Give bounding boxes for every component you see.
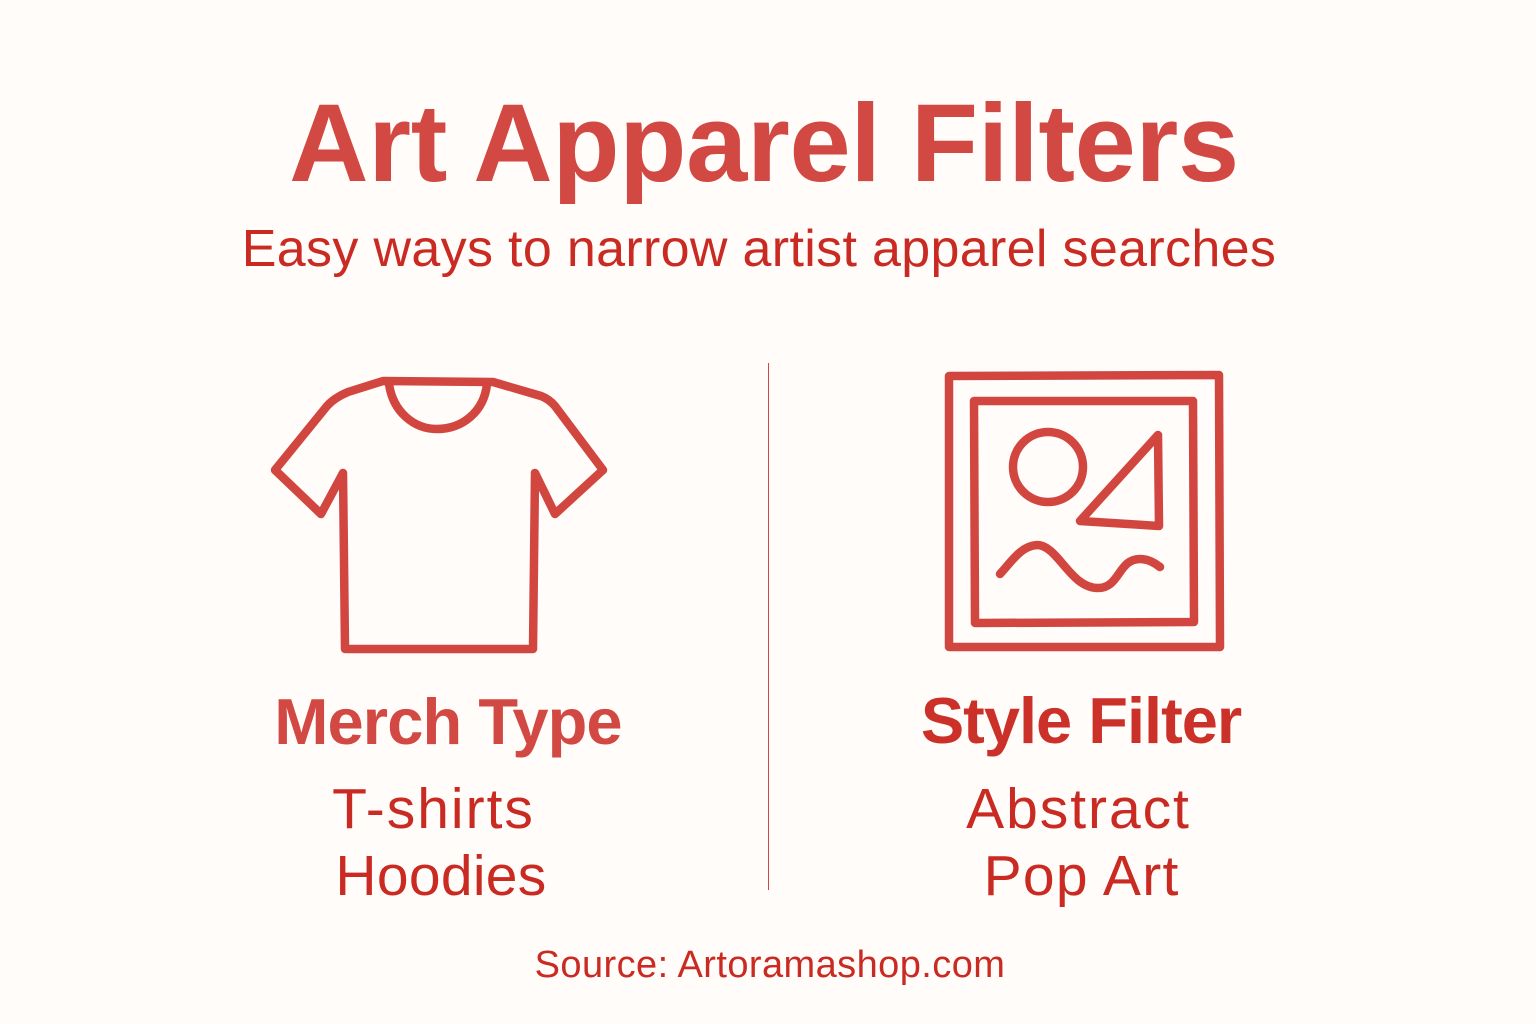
- heading: Style Filter: Style Filter: [921, 684, 1241, 757]
- circle: [1013, 432, 1083, 502]
- shirt outline: [275, 381, 603, 649]
- icon: framed abstract art: [944, 370, 1224, 652]
- triangle: [1080, 435, 1159, 526]
- center divider: [768, 363, 769, 890]
- icon: t-shirt: [270, 376, 608, 654]
- inner frame: [974, 401, 1194, 623]
- heading: Merch Type: Merch Type: [274, 685, 622, 758]
- subtitle: Easy ways to narrow artist apparel searches: [242, 220, 1276, 278]
- list: merch types: [332, 776, 547, 908]
- item: Abstract: Abstract: [966, 776, 1191, 840]
- source: Source: Artoramashop.com: [535, 944, 1005, 986]
- wave: [1000, 545, 1160, 588]
- item: Pop Art: Pop Art: [984, 844, 1180, 908]
- list: style filters: [966, 776, 1191, 908]
- item: Hoodies: Hoodies: [335, 844, 547, 908]
- shirt neckline: [389, 384, 487, 429]
- title: Art Apparel Filters: [289, 82, 1239, 204]
- item: T-shirts: T-shirts: [332, 776, 535, 840]
- outer frame: [949, 375, 1220, 647]
